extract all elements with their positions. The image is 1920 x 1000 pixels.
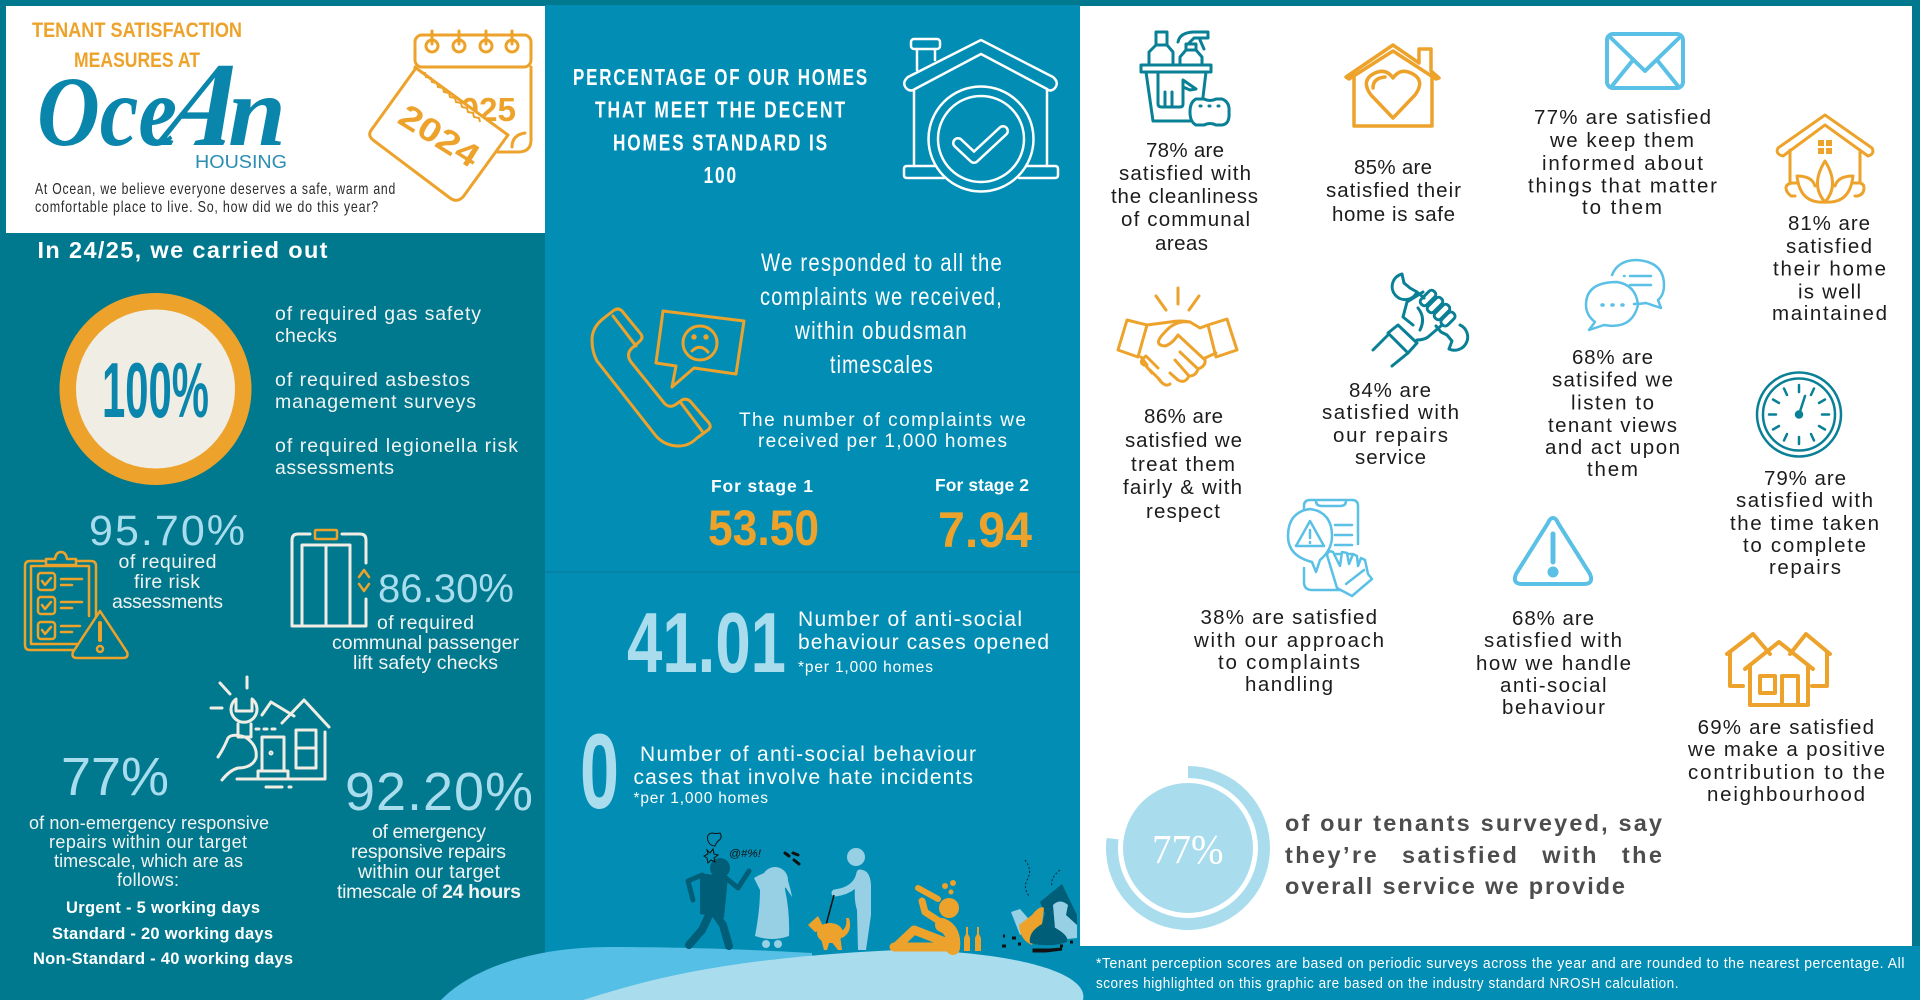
icon: phone alert — [1288, 500, 1372, 596]
stat: hate incidents: *per 1,000 homes — [634, 790, 768, 807]
text: overall satisfaction: they’re satisfied with the — [1285, 842, 1662, 868]
stat: emergency repairs — [337, 762, 533, 903]
icon: home lotus — [1777, 115, 1873, 202]
stat: fair treatment: 86% are — [1144, 405, 1223, 428]
text: complaints response: timescales — [830, 351, 934, 379]
stat: anti-social cases: behaviour cases opened — [798, 631, 1049, 654]
logo: Ocean Housing: A — [137, 39, 276, 171]
logo: Ocean Housing: n — [228, 56, 286, 167]
stat: cleanliness: areas — [1155, 232, 1208, 255]
stat: emergency repairs: within our target — [357, 861, 501, 883]
logo: Ocean Housing — [37, 39, 287, 172]
text: overall satisfaction: overall service we provide — [1285, 873, 1625, 899]
stat: fair treatment: treat them — [1131, 453, 1235, 476]
stat: complaints handling — [1193, 606, 1384, 696]
stat: neighbourhood: neighbourhood — [1707, 783, 1865, 806]
icon: clipboard warning — [25, 552, 128, 658]
stat: safe home: 85% are — [1354, 156, 1432, 179]
panel: footnote — [1080, 946, 1920, 1000]
heading: decent homes: 100 — [704, 162, 738, 188]
illustration: dog — [808, 916, 850, 950]
stat: lift safety — [332, 567, 520, 674]
stat: neighbourhood: 69% are satisfied — [1698, 716, 1874, 739]
stat: repairs service: satisfied with — [1322, 401, 1459, 424]
chart: 77% donut: 77% — [1152, 826, 1224, 872]
stat: hate incidents: 0 — [580, 711, 619, 831]
stat: listening: listen to — [1571, 392, 1654, 414]
text: complaints response: within obudsman — [794, 317, 968, 345]
stat: well maintained: 81% are — [1788, 212, 1870, 235]
icon: handshake — [1118, 288, 1237, 385]
icon: clock — [1757, 372, 1841, 456]
illustration: dog walker — [826, 848, 871, 950]
illustration: angry person — [688, 833, 761, 946]
stat: complaints handling: handling — [1245, 673, 1333, 696]
stat: listening — [1545, 346, 1680, 481]
icon: warning triangle — [1515, 518, 1591, 584]
heading: decent homes: HOMES STANDARD IS — [613, 130, 829, 156]
text: 100% items — [275, 303, 518, 479]
intro text: comfortable place to live. So, how did we do this year? — [35, 199, 379, 216]
title — [32, 19, 242, 72]
stat: safe home: home is safe — [1332, 203, 1455, 226]
stat: anti-social cases: *per 1,000 homes — [798, 659, 933, 676]
stat: listening: them — [1587, 458, 1638, 481]
text: 100% items: management surveys — [275, 391, 476, 413]
icon: home heart — [1346, 45, 1439, 126]
heading: decent homes — [573, 64, 869, 188]
stat: informed: to them — [1582, 196, 1662, 219]
icon: calendar 2024 to 2025: 2025 — [442, 91, 516, 128]
text: 100% items: checks — [275, 325, 337, 347]
stat: stage 2 — [935, 475, 1032, 558]
stat: complaints handling: 38% are satisfied — [1200, 606, 1377, 629]
logo: Ocean Housing: Oce — [37, 56, 177, 167]
logo: Ocean Housing: HOUSING — [195, 152, 287, 172]
icon: calendar 2024 to 2025 — [370, 31, 531, 200]
stat: non-emergency repairs: timescale, which are as — [54, 851, 243, 871]
stat: listening: and act upon — [1545, 436, 1680, 459]
heading: in 24/25: In 24/25, we carried out — [38, 237, 328, 263]
text: complaints per 1000 — [739, 410, 1026, 452]
stat: fair treatment: satisfied we — [1125, 429, 1242, 452]
illustration: hills — [441, 947, 1083, 1000]
stat: repairs service — [1322, 379, 1459, 469]
stat: repair time: the time taken — [1730, 512, 1879, 535]
text: complaints per 1000: received per 1,000 homes — [758, 431, 1007, 452]
stat: fair treatment — [1123, 405, 1242, 523]
text: complaints response: We responded to all the — [761, 249, 1003, 277]
stat: emergency repairs: responsive repairs — [351, 841, 506, 863]
stat: non-emergency repairs — [29, 747, 293, 968]
stat: safe home — [1326, 156, 1461, 226]
stat: repairs service: 84% are — [1349, 379, 1431, 402]
illustration: person drinking — [894, 880, 981, 951]
illustration: crying woman — [754, 853, 799, 948]
stat: fair treatment: fairly & with — [1123, 476, 1242, 499]
icon: calendar 2024 to 2025: 2024 — [392, 97, 487, 175]
stat: non-emergency repairs: 77% — [61, 747, 169, 807]
stat: lift safety: communal passenger — [332, 632, 520, 654]
stat: hate incidents: cases that involve hate incidents — [634, 766, 973, 789]
text: complaints response: complaints we received, — [760, 283, 1003, 311]
stat: hate incidents — [580, 711, 976, 831]
stat: emergency repairs: 92.20% — [345, 762, 533, 822]
intro text: At Ocean, we believe everyone deserves a safe, warm and — [35, 181, 396, 198]
stat: fire risk: 95.70% — [89, 507, 245, 555]
stat: hate incidents: Number of anti-social behaviour — [640, 743, 976, 766]
stat: informed: we keep them — [1549, 129, 1694, 152]
stat: anti-social handling: how we handle — [1476, 652, 1631, 675]
intro text — [35, 181, 396, 216]
stat: repair time — [1730, 467, 1879, 579]
stat: non-emergency repairs: follows: — [117, 870, 179, 890]
panel: right column satisfaction — [1080, 6, 1912, 946]
icon: speech bubbles — [1586, 260, 1664, 330]
stat: cleanliness: of communal — [1121, 208, 1250, 231]
stat: non-emergency repairs: repairs within our target — [49, 832, 247, 852]
panel: footnote: scores highlighted on this graphic are based on the industry standard NROSH calculation. — [1096, 975, 1679, 992]
stat: lift safety: of required — [377, 612, 474, 634]
chart: 77% donut — [1106, 766, 1270, 930]
stat: emergency repairs: timescale of 24 hours — [337, 881, 521, 903]
illustration: angry person: @#%! — [729, 848, 761, 860]
stat: cleanliness — [1111, 139, 1258, 255]
stat: well maintained — [1772, 212, 1887, 325]
text: 100% items: assessments — [275, 457, 394, 479]
stat: fire risk: of required — [118, 551, 216, 573]
icon: cleaning supplies — [1141, 32, 1229, 125]
stat: emergency repairs: of emergency — [372, 821, 486, 843]
stat: well maintained: is well — [1798, 280, 1861, 304]
stat: lift safety: lift safety checks — [353, 652, 498, 674]
stat: non-emergency repairs: of non-emergency responsive — [29, 813, 269, 833]
heading: decent homes: PERCENTAGE OF OUR HOMES — [573, 64, 869, 90]
icon: lift — [292, 530, 369, 626]
stat: non-emergency repairs: Standard - 20 working days — [52, 925, 273, 943]
text: 100% items: of required gas safety — [275, 303, 481, 325]
stat: informed: informed about — [1542, 152, 1703, 175]
stat: fire risk: fire risk — [134, 571, 200, 593]
stat: stage 1: For stage 1 — [711, 476, 813, 496]
stat: cleanliness: satisfied with — [1119, 162, 1251, 185]
panel: header — [6, 6, 546, 233]
stat: complaints handling: to complaints — [1218, 651, 1360, 674]
text: complaints response — [760, 249, 1003, 379]
text: 100% items: of required legionella risk — [275, 435, 518, 457]
panel: left column checks — [25, 237, 533, 968]
stat: anti-social handling: anti-social — [1500, 674, 1606, 697]
heading: decent homes: THAT MEET THE DECENT — [595, 97, 847, 123]
stat: repair time: repairs — [1769, 556, 1841, 579]
stat: listening: satisifed we — [1552, 368, 1673, 392]
title: TENANT SATISFACTION — [32, 19, 242, 42]
stat: stage 2: For stage 2 — [935, 475, 1029, 495]
panel: middle column — [441, 5, 1083, 1000]
text: overall satisfaction: of our tenants surveyed, say — [1285, 810, 1662, 836]
stat: repair time: 79% are — [1764, 467, 1846, 490]
text: overall satisfaction — [1285, 810, 1662, 899]
stat: anti-social cases: 41.01 — [627, 596, 786, 691]
stat: listening: tenant views — [1548, 414, 1677, 437]
stat: fair treatment: respect — [1146, 500, 1220, 523]
stat: repairs service: service — [1355, 446, 1426, 469]
stat: informed — [1528, 106, 1717, 219]
chart: 100% ring — [60, 293, 252, 485]
text: 100% items: of required asbestos — [275, 369, 470, 391]
icon: houses — [1727, 634, 1830, 705]
stat: non-emergency repairs: Non-Standard - 40 working days — [33, 950, 293, 968]
stat: repair time: to complete — [1743, 534, 1866, 557]
stat: lift safety: 86.30% — [378, 567, 514, 611]
icon: hand with wrench — [1373, 274, 1468, 366]
stat: fire risk — [89, 507, 245, 613]
stat: cleanliness: 78% are — [1146, 139, 1224, 162]
stat: repairs service: our repairs — [1333, 424, 1448, 447]
stat: safe home: satisfied their — [1326, 179, 1461, 202]
icon: phone complaint — [592, 309, 744, 446]
stat: well maintained: satisfied — [1786, 235, 1872, 258]
stat: listening: 68% are — [1572, 346, 1653, 369]
stat: anti-social cases: Number of anti-social — [798, 608, 1022, 631]
illustration: rubbish bags — [1002, 860, 1077, 951]
icon: house check — [904, 39, 1058, 192]
icon: house repair wrench — [211, 677, 329, 787]
stat: non-emergency repairs: Urgent - 5 working days — [66, 899, 260, 917]
stat: fire risk: assessments — [112, 591, 223, 613]
stat: neighbourhood — [1687, 716, 1885, 806]
icon: envelope — [1607, 34, 1683, 88]
stat: informed: things that matter — [1528, 174, 1717, 198]
stat: repair time: satisfied with — [1736, 489, 1873, 512]
stat: neighbourhood: we make a positive — [1687, 738, 1885, 761]
stat: well maintained: their home — [1773, 258, 1886, 280]
chart: 100% ring: 100% — [102, 346, 209, 434]
stat: well maintained: maintained — [1772, 302, 1887, 325]
stat: stage 2: 7.94 — [938, 502, 1032, 558]
stat: anti-social handling: satisfied with — [1484, 629, 1622, 652]
stat: cleanliness: the cleanliness — [1111, 185, 1258, 208]
stat: neighbourhood: contribution to the — [1688, 761, 1885, 784]
title: MEASURES AT — [74, 49, 200, 72]
stat: anti-social handling: 68% are — [1512, 607, 1594, 630]
text: complaints per 1000: The number of complaints we — [739, 410, 1026, 431]
stat: informed: 77% are satisfied — [1534, 106, 1711, 129]
stat: anti-social handling: behaviour — [1502, 696, 1605, 719]
stat: stage 1 — [708, 476, 819, 556]
stat: anti-social handling — [1476, 607, 1631, 719]
stat: stage 1: 53.50 — [708, 500, 819, 556]
stat: complaints handling: with our approach — [1193, 629, 1384, 652]
stat: anti-social cases — [627, 596, 1049, 691]
